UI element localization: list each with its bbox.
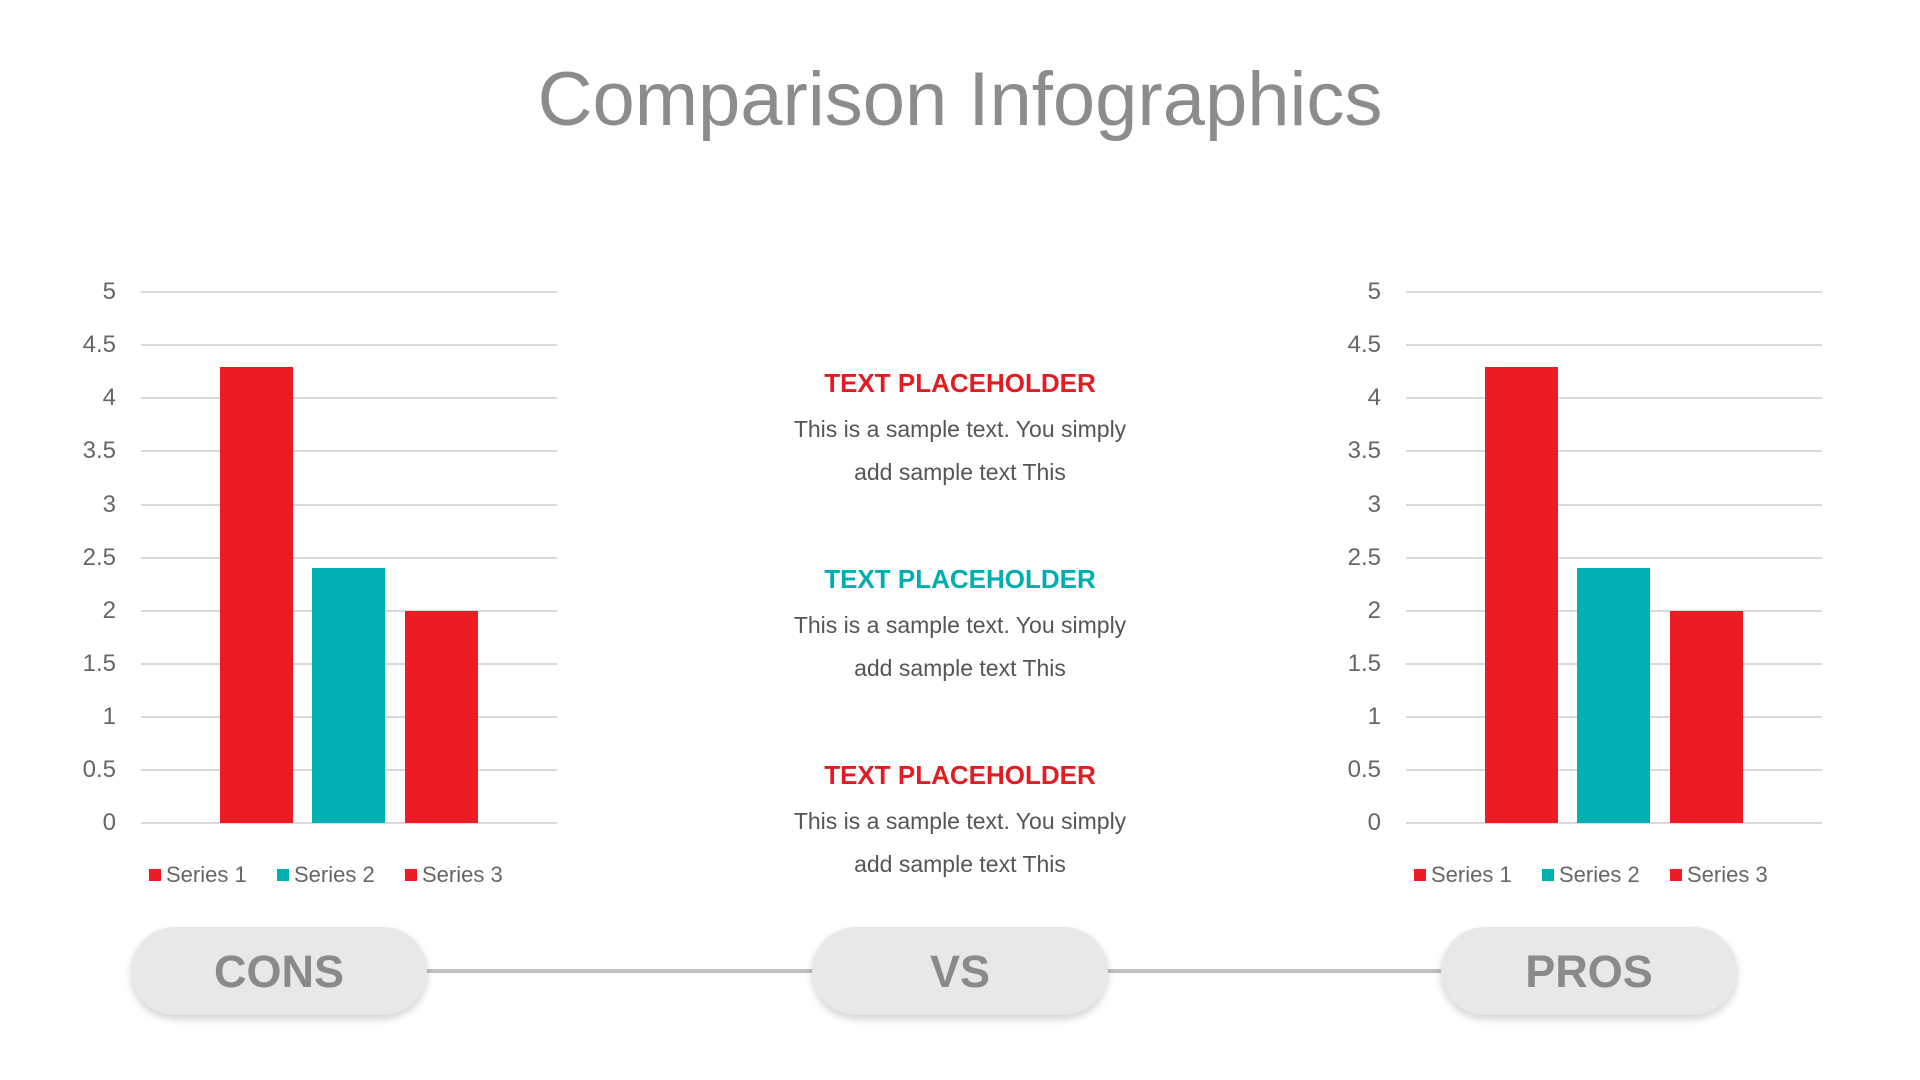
chart: pros: 4.5 [1348,331,1381,358]
pill: vs [812,927,1108,1015]
legend [149,862,503,887]
chart: cons: 1.5 [83,650,116,677]
pill: pros: PROS [1525,946,1653,997]
text: This is a sample text. You simply [794,612,1126,638]
bar: series 1 [220,367,293,823]
text: TEXT PLACEHOLDER [824,760,1096,790]
chart: cons: 0.5 [83,756,116,783]
text: TEXT PLACEHOLDER [824,564,1096,594]
chart: cons [83,278,557,887]
chart: pros: 0 [1368,809,1381,836]
bar: series 1 [1485,367,1558,823]
chart: cons: 2.5 [83,544,116,571]
chart: cons: 3.5 [83,437,116,464]
bar: series 3 [1670,611,1743,823]
chart: pros: 4 [1368,384,1381,411]
legend: Series 2 [1559,862,1640,887]
text: This is a sample text. You simply [794,416,1126,442]
chart: cons: 1 [103,703,116,730]
chart: pros [1348,278,1822,887]
chart: cons: 4 [103,384,116,411]
pill: cons [131,927,427,1015]
text: add sample text This [854,459,1066,485]
legend: Series 1 [1431,862,1512,887]
bar: series 2 [1577,568,1650,823]
title: Comparison Infographics [538,57,1382,142]
chart: cons: 0 [103,809,116,836]
text block 1 [794,368,1126,485]
text: add sample text This [854,655,1066,681]
legend: Series 3 [1687,862,1768,887]
chart: cons: 4.5 [83,331,116,358]
chart: cons: 3 [103,491,116,518]
bar: series 3 [405,611,478,823]
chart: cons: 2 [103,597,116,624]
chart: pros: 3 [1368,491,1381,518]
bar: series 2 [312,568,385,823]
text block 3 [794,760,1126,877]
chart: pros: 5 [1368,278,1381,305]
chart: pros: 1 [1368,703,1381,730]
pill: vs: VS [930,946,990,997]
legend: Series 2 [294,862,375,887]
text: This is a sample text. You simply [794,808,1126,834]
legend [1414,862,1768,887]
chart: pros: 1.5 [1348,650,1381,677]
chart: pros: 3.5 [1348,437,1381,464]
connector line [420,969,1450,973]
text block 2 [794,564,1126,681]
chart: pros: 0.5 [1348,756,1381,783]
chart: cons: 5 [103,278,116,305]
legend: Series 1 [166,862,247,887]
text: TEXT PLACEHOLDER [824,368,1096,398]
pill: pros [1441,927,1737,1015]
pill: cons: CONS [214,946,344,997]
legend: Series 3 [422,862,503,887]
chart: pros: 2.5 [1348,544,1381,571]
text: add sample text This [854,851,1066,877]
chart: pros: 2 [1368,597,1381,624]
